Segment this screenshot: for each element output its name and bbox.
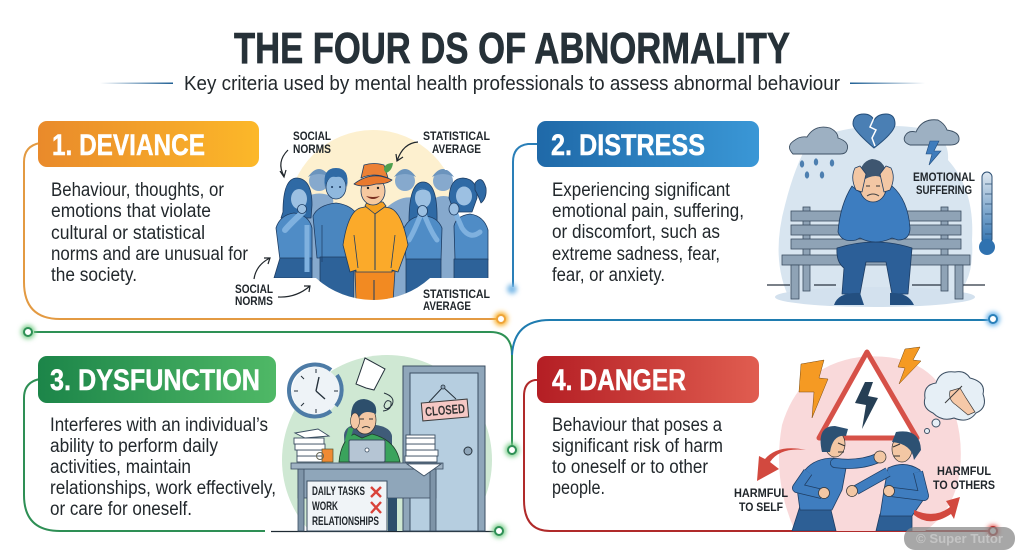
panel: danger — [524, 347, 999, 537]
text block: deviance: cultural or statistical — [51, 223, 205, 244]
label: statistical average top — [423, 131, 490, 156]
panel: deviance — [21, 114, 1015, 559]
text block: dysfunction: ability to perform daily — [50, 436, 218, 457]
icon: thought bubble — [924, 372, 984, 434]
left fighter — [792, 426, 886, 531]
title: THE FOUR DS OF ABNORMALITY — [234, 24, 790, 73]
heading: danger: 4. DANGER — [552, 364, 686, 397]
label: social norms top line two: NORMS — [293, 144, 331, 156]
icon: mug — [316, 449, 333, 462]
label: emotional suffering: SUFFERING — [916, 185, 972, 197]
heading: distress — [537, 121, 759, 167]
icon: broken clock — [289, 364, 342, 417]
far right woman — [449, 178, 488, 279]
icon: thermometer — [979, 172, 995, 255]
icon: orange bolts — [799, 347, 921, 418]
panel: dysfunction — [24, 355, 506, 559]
label: social norms bottom — [235, 284, 273, 308]
arrow: harmful to self — [757, 448, 806, 481]
arrow: harmful to others — [914, 497, 960, 521]
right fighter — [846, 431, 926, 531]
back row people — [306, 171, 456, 300]
fighters — [792, 426, 926, 531]
ground line — [767, 284, 985, 286]
ground line — [271, 530, 495, 532]
text block: deviance: emotions that violate — [51, 201, 211, 222]
text block: danger: people. — [552, 478, 605, 499]
illustration: crowd around nonconformist — [235, 130, 490, 313]
icon: heart crack — [870, 118, 876, 146]
worker — [339, 399, 400, 462]
text block: distress: emotional pain, suffering, — [552, 201, 744, 222]
text block: dysfunction: or care for oneself. — [50, 499, 192, 520]
panel border: distress — [513, 144, 538, 287]
heading: danger — [537, 356, 759, 403]
connector: blue link — [512, 320, 988, 355]
icon: broken heart — [853, 114, 895, 148]
subtitle: Key criteria used by mental health professionals to assess abnormal behaviour — [184, 72, 840, 95]
text block: distress — [552, 180, 744, 286]
icon: scribble — [383, 393, 393, 411]
illustration: overwhelmed worker — [282, 355, 492, 532]
text block: deviance: norms and are unusual for — [51, 244, 249, 265]
label: harmful to self — [734, 488, 788, 514]
connector node: blue right — [986, 312, 1000, 326]
text block: dysfunction — [50, 415, 276, 520]
panel border: deviance — [24, 143, 500, 319]
label: emotional suffering — [913, 172, 975, 197]
connector node: orange — [494, 312, 508, 326]
panel: distress — [21, 114, 1015, 559]
text block: danger: significant risk of harm — [552, 436, 723, 457]
man in crowd — [313, 168, 358, 301]
icon: left rain cloud — [789, 127, 848, 179]
heading: dysfunction: 3. DYSFUNCTION — [50, 364, 260, 397]
panel border: danger — [524, 380, 990, 531]
text block: dysfunction: activities, maintain — [50, 457, 191, 478]
watermark: © Super Tutor — [916, 532, 1003, 546]
text block: deviance: the society. — [51, 265, 137, 286]
text block: distress: fear, or anxiety. — [552, 265, 665, 286]
heading: deviance: 1. DEVIANCE — [52, 129, 205, 162]
door — [403, 366, 485, 531]
label: statistical average bottom — [423, 289, 490, 313]
connector node: red — [987, 525, 999, 537]
checklist note: RELATIONSHIPS — [312, 516, 379, 528]
checklist note: DAILY TASKS — [312, 486, 365, 498]
connector node: green left — [21, 325, 35, 339]
checklist note — [307, 481, 387, 531]
label: statistical average bottom: STATISTICAL — [423, 289, 490, 301]
icon: warning triangle — [819, 352, 917, 438]
label: statistical average top: STATISTICAL — [423, 131, 490, 143]
label: harmful to others — [933, 466, 995, 492]
heading: deviance — [38, 121, 259, 167]
text block: deviance — [51, 180, 249, 286]
label: social norms bottom: NORMS — [235, 296, 273, 308]
panel border: dysfunction — [24, 379, 265, 531]
heading: dysfunction — [38, 356, 276, 403]
left woman — [274, 178, 312, 278]
text block: danger — [552, 415, 723, 499]
text block: dysfunction: Interferes with an individual’s — [50, 415, 268, 436]
label: harmful to self: TO SELF — [739, 502, 783, 514]
illustration: man on bench — [767, 114, 995, 307]
connector node: green right — [492, 524, 506, 538]
arrows: crowd labels — [254, 142, 418, 297]
central man — [343, 163, 408, 302]
label: social norms bottom: SOCIAL — [235, 284, 273, 296]
text block: danger: Behaviour that poses a — [552, 415, 722, 436]
man — [834, 159, 914, 305]
text block: dysfunction: relationships, work effectively, — [50, 478, 276, 499]
label: harmful to others: HARMFUL — [937, 466, 991, 478]
right woman — [404, 182, 442, 303]
connector node: blue glow — [507, 284, 517, 294]
label: harmful to others: TO OTHERS — [933, 480, 995, 492]
text block: danger: to oneself or to other — [552, 457, 709, 478]
paper stacks — [294, 429, 438, 462]
connector node: green centre — [505, 443, 519, 457]
icon: flying paper — [356, 358, 385, 390]
checklist note: WORK — [312, 501, 338, 513]
desk — [291, 463, 443, 531]
connector: green link — [34, 332, 512, 446]
bench — [782, 207, 970, 299]
text block: distress: or discomfort, such as — [552, 222, 720, 243]
label: harmful to self: HARMFUL — [734, 488, 788, 500]
label: statistical average top: AVERAGE — [432, 144, 481, 156]
label: social norms top: SOCIAL — [293, 131, 331, 143]
heading: distress: 2. DISTRESS — [551, 129, 705, 162]
sign: closed — [421, 399, 469, 421]
label: statistical average bottom: AVERAGE — [423, 301, 471, 313]
text block: distress: extreme sadness, fear, — [552, 244, 720, 265]
icon: storm cloud — [904, 120, 959, 165]
text block: deviance: Behaviour, thoughts, or — [51, 180, 225, 201]
text block: distress: Experiencing significant — [552, 180, 731, 201]
label: emotional suffering: EMOTIONAL — [913, 172, 975, 184]
sign: closed: CLOSED — [424, 401, 466, 419]
illustration: fight and warning sign — [734, 347, 995, 531]
watermark — [904, 527, 1015, 550]
